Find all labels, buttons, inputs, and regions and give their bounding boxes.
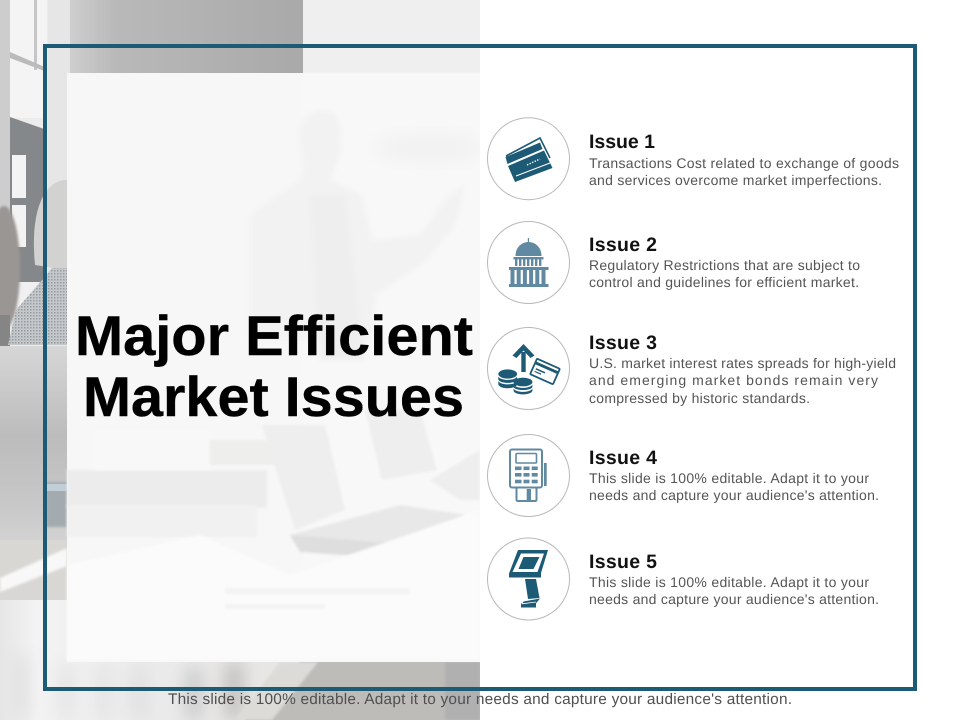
icon: credit cards	[488, 118, 570, 200]
description	[589, 470, 879, 503]
title	[75, 304, 473, 428]
translucent title panel	[67, 73, 485, 662]
heading: Issue 4	[589, 447, 657, 469]
item: issue 5	[488, 538, 879, 620]
description: Regulatory Restrictions that are subject to	[589, 257, 860, 273]
description	[589, 355, 896, 406]
item: issue 2	[488, 222, 860, 304]
lower left blurred area	[0, 346, 67, 546]
heading: Issue 2	[589, 234, 657, 256]
photo floor strip below the panel	[0, 600, 300, 720]
description	[589, 257, 860, 290]
description	[589, 574, 879, 607]
seated woman at far left	[0, 206, 20, 330]
heading: Issue 3	[589, 332, 657, 354]
icon: information kiosk	[488, 538, 570, 620]
table and laptops ghost	[67, 470, 267, 508]
title: Market Issues	[83, 365, 464, 428]
icon: arrow, coins and card	[488, 328, 570, 410]
white right half	[480, 0, 960, 720]
description: U.S. market interest rates spreads for high-yield	[589, 355, 896, 371]
description: This slide is 100% editable. Adapt it to your	[589, 574, 869, 590]
description	[589, 155, 899, 188]
description: This slide is 100% editable. Adapt it to your	[589, 470, 869, 486]
description: and services overcome market imperfections.	[589, 172, 882, 188]
item: issue 3	[488, 328, 896, 410]
description: and emerging market bonds remain very	[589, 372, 878, 388]
heading: Issue 1	[589, 131, 655, 153]
title: Major Efficient	[75, 304, 473, 367]
footer note: This slide is 100% editable. Adapt it to your needs and capture your audience's attention.	[168, 691, 792, 708]
item: issue 1	[488, 118, 899, 200]
seated man with checked shirt	[34, 180, 67, 270]
background photo: meeting room	[0, 0, 480, 720]
item: issue 4	[488, 434, 879, 516]
icon: capitol building	[488, 222, 570, 304]
description: needs and capture your audience's attention.	[589, 591, 879, 607]
description: needs and capture your audience's attention.	[589, 487, 879, 503]
heading: Issue 5	[589, 551, 657, 573]
description: Transactions Cost related to exchange of goods	[589, 155, 899, 171]
presenter ghost	[250, 110, 465, 340]
description: control and guidelines for efficient market.	[589, 274, 859, 290]
icon: card payment terminal	[488, 434, 570, 516]
description: compressed by historic standards.	[589, 390, 810, 406]
